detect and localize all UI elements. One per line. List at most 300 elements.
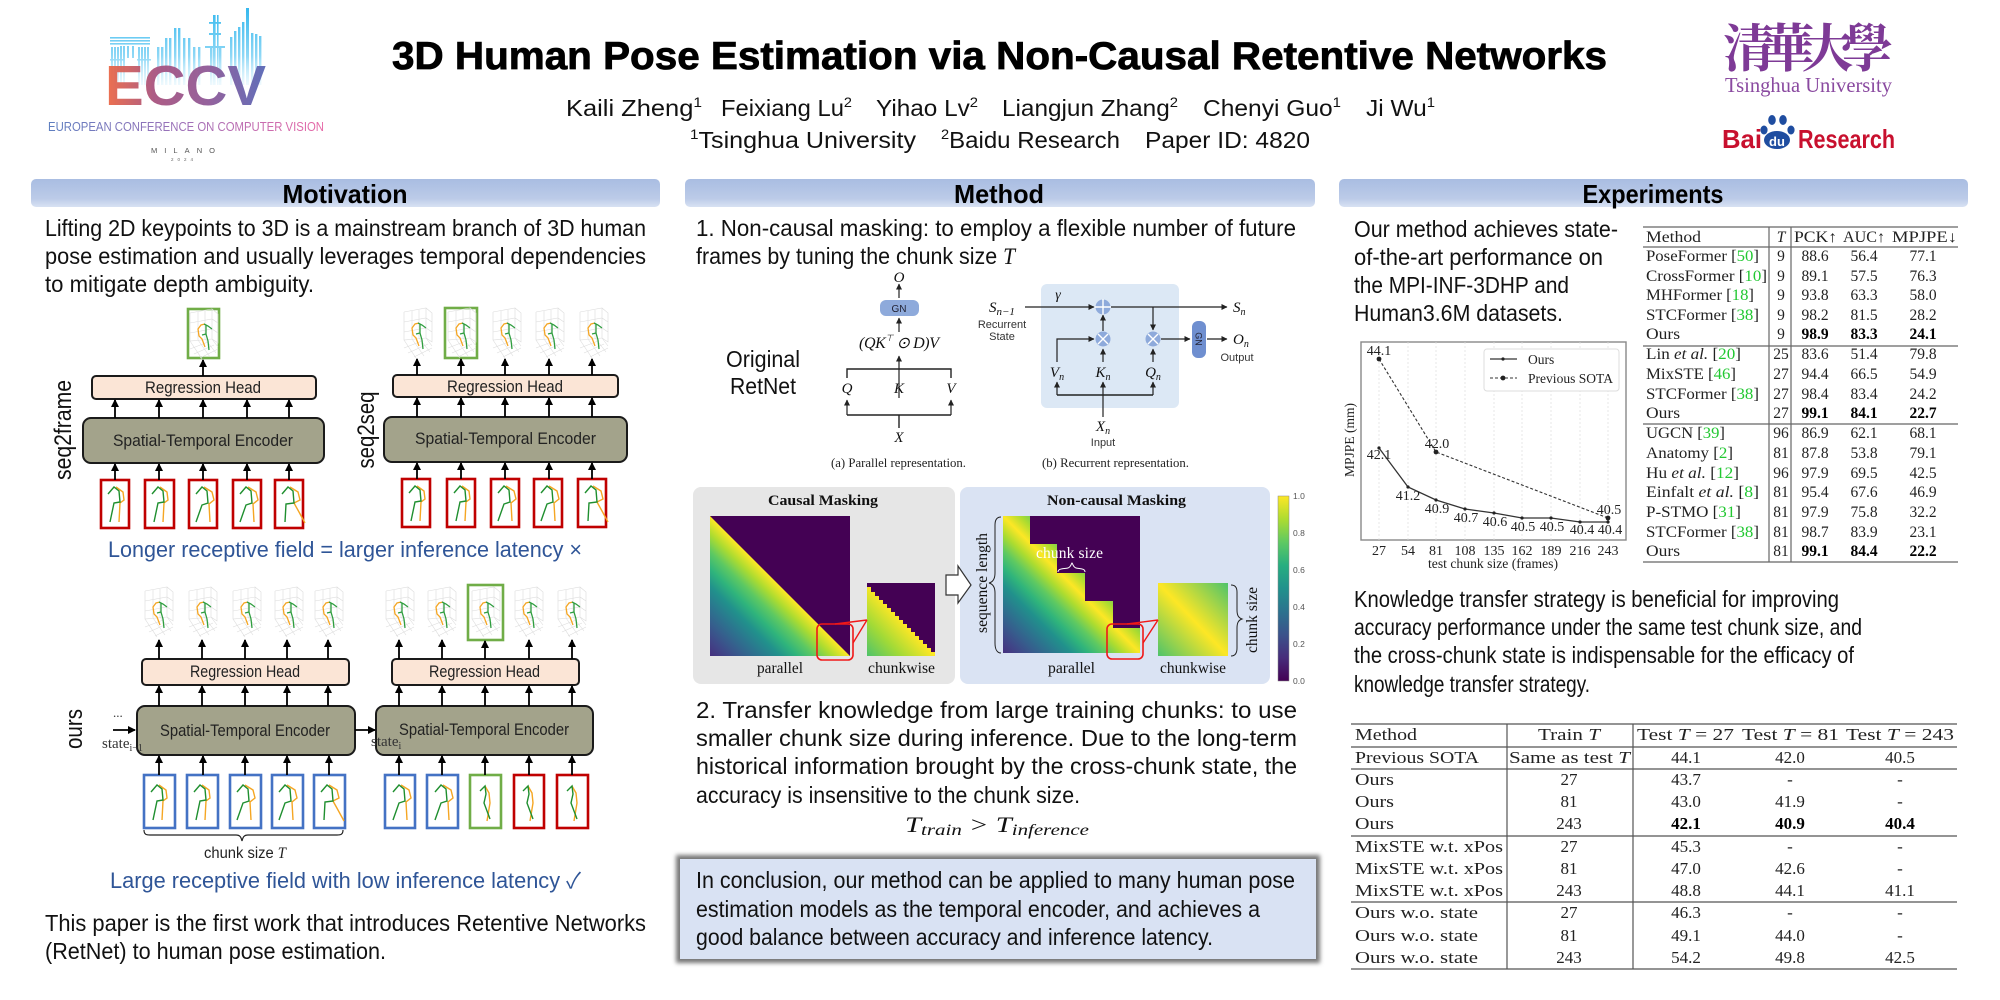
table: MPI-INF-3DHP comparison: Ours <box>1646 543 1680 560</box>
table: knowledge transfer comparison: - <box>1897 903 1903 922</box>
diagram: ours: Spatial-Temporal Encoder <box>160 721 330 740</box>
text: knowledge transfer: knowledge transfer strategy. <box>1354 671 1590 697</box>
diagram: ours: i−1 <box>130 743 143 754</box>
affiliations: 2 <box>941 126 949 142</box>
diagram: ours: i <box>398 741 402 752</box>
table: MPI-INF-3DHP comparison: 51.4 <box>1850 346 1878 363</box>
line chart: MPJPE vs test chunk size: 40.6 <box>1483 515 1507 530</box>
line chart: MPJPE vs test chunk size: 162 <box>1512 544 1532 559</box>
text: non-causal masking <box>696 215 1296 269</box>
colorbar: 0.2 <box>1293 639 1305 649</box>
table: knowledge transfer comparison: Ours <box>1355 770 1394 789</box>
table: MPI-INF-3DHP comparison: P-STMO [ 31] <box>1646 504 1741 521</box>
text: experiments intro: Human3.6M datasets. <box>1354 300 1563 326</box>
panel: motivation <box>31 179 660 964</box>
table: MPI-INF-3DHP comparison: 79.1 <box>1909 445 1937 462</box>
callout: conclusion: good balance between accuracy and inference latency. <box>696 924 1213 950</box>
table: MPI-INF-3DHP comparison: 83.3 <box>1850 326 1878 343</box>
line chart: MPJPE vs test chunk size: 135 <box>1484 544 1504 559</box>
line chart: MPJPE vs test chunk size: 216 <box>1570 544 1590 559</box>
logo: Tsinghua University: Tsinghua University <box>1725 73 1892 97</box>
text: knowledge transfer: accuracy performance under the same test chunk size, and <box>1354 614 1862 640</box>
colorbar: 0.6 <box>1293 565 1305 575</box>
table: MPI-INF-3DHP comparison: MixSTE [ 46] <box>1646 366 1736 383</box>
table: knowledge transfer comparison: 43.7 <box>1671 770 1701 789</box>
table: knowledge transfer comparison: - <box>1787 770 1793 789</box>
table: MPI-INF-3DHP comparison: 81 <box>1773 484 1789 501</box>
formula: > T <box>962 812 1014 837</box>
heading: method <box>685 179 1315 209</box>
table: knowledge transfer comparison: 49.8 <box>1775 948 1805 967</box>
text: transfer knowledge: accuracy is insensitive to the chunk size. <box>696 782 1080 808</box>
authors: Kaili Zheng <box>566 95 681 121</box>
diagram: ours: Spatial-Temporal Encoder <box>399 720 569 739</box>
authors: 1 <box>1333 94 1341 110</box>
diagram: parallel representation: V <box>946 381 957 397</box>
table: MPI-INF-3DHP comparison: 57.5 <box>1850 268 1878 285</box>
table: MPI-INF-3DHP comparison: 83.4 <box>1850 386 1878 403</box>
diagram: seq2frame: Regression Head <box>145 378 261 397</box>
caption: large receptive field: Large receptive field with low inference latency ✓ <box>110 868 582 893</box>
table: knowledge transfer comparison: Ours <box>1355 792 1394 811</box>
table: knowledge transfer comparison: 46.3 <box>1671 903 1701 922</box>
label: original retnet: RetNet <box>730 373 797 399</box>
table: MPI-INF-3DHP comparison: 28.2 <box>1909 307 1937 324</box>
formula: train <box>921 822 962 839</box>
table: MPI-INF-3DHP comparison: 89.1 <box>1801 268 1829 285</box>
diagram: ours: Regression Head <box>429 662 540 681</box>
table: MPI-INF-3DHP comparison: STCFormer [ 38] <box>1646 307 1759 324</box>
affiliations: 1 <box>690 126 699 142</box>
table: knowledge transfer comparison: 42.5 <box>1885 948 1915 967</box>
table: MPI-INF-3DHP comparison: 95.4 <box>1801 484 1829 501</box>
diagram: recurrent representation: n−1 <box>996 306 1015 318</box>
table: knowledge transfer comparison: 42.1 <box>1671 814 1701 833</box>
label: original retnet: Original <box>726 346 800 372</box>
authors: 2 <box>970 94 978 110</box>
diagram: seq2seq <box>353 308 627 527</box>
text: knowledge transfer <box>1354 586 1862 697</box>
line chart: MPJPE vs test chunk size: 108 <box>1454 544 1476 559</box>
table: MPI-INF-3DHP comparison: 81 <box>1773 504 1789 521</box>
table: knowledge transfer comparison: - <box>1897 770 1903 789</box>
table: knowledge transfer comparison: MixSTE w.t. xPos <box>1355 837 1503 856</box>
table: MPI-INF-3DHP comparison: MHFormer [ 18] <box>1646 287 1754 304</box>
logo: ECCV: MILANO <box>151 146 215 155</box>
table: MPI-INF-3DHP comparison: 63.3 <box>1850 287 1878 304</box>
table: MPI-INF-3DHP comparison: 69.5 <box>1850 465 1878 482</box>
table: MPI-INF-3DHP comparison: Lin et al. [20] <box>1646 346 1741 363</box>
table: knowledge transfer comparison: Test T = 81 <box>1742 725 1839 744</box>
diagram: recurrent representation: Output <box>1220 352 1254 364</box>
diagram: parallel representation: (a) Parallel representation. <box>831 455 966 470</box>
text: transfer knowledge <box>696 697 1297 808</box>
colorbar <box>1278 491 1305 686</box>
table: MPI-INF-3DHP comparison: 86.9 <box>1801 425 1829 442</box>
table: MPI-INF-3DHP comparison: STCFormer [ 38] <box>1646 386 1759 403</box>
line chart: MPJPE vs test chunk size: 27 <box>1372 544 1386 559</box>
table: knowledge transfer comparison: 81 <box>1560 792 1578 811</box>
table: MPI-INF-3DHP comparison: 27 <box>1773 366 1789 383</box>
logo: ECCV: ECCV <box>105 54 266 118</box>
table: MPI-INF-3DHP comparison: CrossFormer [ 10] <box>1646 268 1767 285</box>
authors: Chenyi Guo <box>1203 95 1324 121</box>
table: MPI-INF-3DHP comparison: 84.4 <box>1850 543 1878 560</box>
text: motivation closing: (RetNet) to human pose estimation. <box>45 938 386 964</box>
diagram: recurrent representation: K <box>1095 365 1106 381</box>
table: MPI-INF-3DHP comparison: 62.1 <box>1850 425 1878 442</box>
table: MPI-INF-3DHP comparison: STCFormer [ 38] <box>1646 524 1759 541</box>
authors: 2 <box>844 94 852 110</box>
table: MPI-INF-3DHP comparison: 54.9 <box>1909 366 1937 383</box>
diagram: recurrent representation: S <box>989 300 996 316</box>
table: MPI-INF-3DHP comparison: 42.5 <box>1909 465 1937 482</box>
table: knowledge transfer comparison: - <box>1897 792 1903 811</box>
colorbar: 1.0 <box>1293 491 1305 501</box>
callout: conclusion <box>676 855 1320 963</box>
panel: causal masking <box>693 487 955 684</box>
affiliations: Tsinghua University <box>699 127 917 153</box>
table: knowledge transfer comparison: 27 <box>1560 837 1578 856</box>
panel: non-causal masking: sequence length <box>974 533 991 633</box>
table: knowledge transfer comparison: 47.0 <box>1671 859 1701 878</box>
table: knowledge transfer comparison: Previous SOTA <box>1355 748 1480 767</box>
diagram: seq2frame: seq2frame <box>50 380 77 480</box>
table: knowledge transfer comparison: - <box>1787 903 1793 922</box>
table: MPI-INF-3DHP comparison: 56.4 <box>1850 248 1878 265</box>
table: MPI-INF-3DHP comparison: 81 <box>1773 543 1789 560</box>
line chart: MPJPE vs test chunk size: 81 <box>1429 544 1443 559</box>
callout: conclusion: estimation models as the temporal encoder, and achieves a <box>696 896 1260 922</box>
panel: non-causal masking <box>960 487 1270 684</box>
panel: causal masking: Causal Masking <box>768 493 879 509</box>
diagram: parallel representation <box>831 270 966 470</box>
text: experiments intro: of-the-art performance on <box>1354 244 1603 270</box>
table: MPI-INF-3DHP comparison: 9 <box>1777 248 1785 265</box>
table: knowledge transfer comparison: Ours w.o. state <box>1355 948 1478 967</box>
text: transfer knowledge: historical information brought by the cross-chunk state, the <box>696 753 1297 779</box>
table: MPI-INF-3DHP comparison <box>1643 227 1958 562</box>
table: MPI-INF-3DHP comparison: 32.2 <box>1909 504 1937 521</box>
text: motivation intro <box>45 215 646 297</box>
text: non-causal masking: frames by tuning the chunk size T <box>696 243 1017 269</box>
table: MPI-INF-3DHP comparison: 99.1 <box>1801 405 1829 422</box>
panel: experiments <box>1339 179 1968 969</box>
table: MPI-INF-3DHP comparison: 81 <box>1773 524 1789 541</box>
callout: conclusion: In conclusion, our method can be applied to many human pose <box>696 867 1295 893</box>
table: knowledge transfer comparison: 243 <box>1556 948 1582 967</box>
text: experiments intro <box>1354 216 1618 326</box>
table: knowledge transfer comparison: 27 <box>1560 770 1578 789</box>
table: knowledge transfer comparison: - <box>1897 926 1903 945</box>
diagram: recurrent representation: γ <box>1055 288 1061 303</box>
diagram: recurrent representation: GN <box>1194 332 1204 346</box>
heading: method: Method <box>954 179 1044 209</box>
table: knowledge transfer comparison: 44.1 <box>1671 748 1701 767</box>
table: MPI-INF-3DHP comparison: 75.8 <box>1850 504 1878 521</box>
table: knowledge transfer comparison: MixSTE w.t. xPos <box>1355 859 1503 878</box>
heading: motivation: Motivation <box>282 179 408 209</box>
text: knowledge transfer: Knowledge transfer strategy is beneficial for improving <box>1354 586 1839 612</box>
line chart: MPJPE vs test chunk size: 40.7 <box>1454 511 1478 526</box>
panel: non-causal masking: chunk size <box>1036 545 1103 562</box>
diagram: seq2seq: Spatial-Temporal Encoder <box>415 429 596 448</box>
diagram: recurrent representation: State <box>989 331 1015 343</box>
text: experiments intro: the MPI-INF-3DHP and <box>1354 272 1569 298</box>
table: knowledge transfer comparison: Test T = 27 <box>1637 725 1735 744</box>
logo: Baidu Research: Bai <box>1722 124 1762 154</box>
table: knowledge transfer comparison: 41.9 <box>1775 792 1805 811</box>
line chart: MPJPE vs test chunk size: 40.4 <box>1598 523 1622 538</box>
table: MPI-INF-3DHP comparison: 9 <box>1777 268 1785 285</box>
table: MPI-INF-3DHP comparison: 66.5 <box>1850 366 1878 383</box>
table: knowledge transfer comparison: 54.2 <box>1671 948 1701 967</box>
diagram: parallel representation: O <box>894 270 905 286</box>
table: MPI-INF-3DHP comparison: 88.6 <box>1801 248 1829 265</box>
table: MPI-INF-3DHP comparison: 84.1 <box>1850 405 1878 422</box>
table: MPI-INF-3DHP comparison: 81 <box>1773 445 1789 462</box>
table: knowledge transfer comparison: - <box>1897 859 1903 878</box>
table: MPI-INF-3DHP comparison: 98.4 <box>1801 386 1829 403</box>
table: MPI-INF-3DHP comparison: Einfalt et al. [8] <box>1646 484 1759 501</box>
table: MPI-INF-3DHP comparison: PCK↑ <box>1794 229 1837 246</box>
line chart: MPJPE vs test chunk size: Ours <box>1528 352 1554 367</box>
diagram: recurrent representation: X <box>1096 419 1105 435</box>
diagram: parallel representation: (QK <box>859 335 886 352</box>
text: experiments intro: Our method achieves state- <box>1354 216 1618 242</box>
line chart: MPJPE vs test chunk size: 40.9 <box>1425 502 1449 517</box>
line chart: MPJPE vs test chunk size: 44.1 <box>1367 344 1391 359</box>
table: MPI-INF-3DHP comparison: 9 <box>1777 287 1785 304</box>
diagram: recurrent representation: n <box>1244 339 1249 350</box>
panel: method <box>676 179 1320 963</box>
table: MPI-INF-3DHP comparison: 97.9 <box>1801 504 1829 521</box>
table: MPI-INF-3DHP comparison: 9 <box>1777 326 1785 343</box>
diagram: recurrent representation: O <box>1233 332 1244 348</box>
line chart: MPJPE vs test chunk size: 40.5 <box>1511 520 1535 535</box>
table: knowledge transfer comparison: MixSTE w.t. xPos <box>1355 881 1503 900</box>
diagram: recurrent representation: n <box>1105 426 1110 437</box>
table: MPI-INF-3DHP comparison: 98.9 <box>1801 326 1829 343</box>
table: knowledge transfer comparison: Ours <box>1355 814 1394 833</box>
table: MPI-INF-3DHP comparison: Anatomy [ 2] <box>1646 445 1733 462</box>
logo: Tsinghua University: 清華大學 <box>1723 21 1893 79</box>
panel: non-causal masking: chunk size <box>1244 587 1261 653</box>
table: MPI-INF-3DHP comparison: 9 <box>1777 307 1785 324</box>
diagram: parallel representation: K <box>893 381 905 397</box>
table: MPI-INF-3DHP comparison: Hu et al. [12] <box>1646 465 1739 482</box>
table: MPI-INF-3DHP comparison: T <box>1777 229 1787 246</box>
panel: non-causal masking: parallel <box>1048 660 1095 677</box>
diagram: ours <box>61 585 593 862</box>
logo: ECCV <box>48 8 324 162</box>
table: MPI-INF-3DHP comparison: 22.7 <box>1909 405 1937 422</box>
panel: non-causal masking: Non-causal Masking <box>1047 493 1187 509</box>
text: knowledge transfer: the cross-chunk state is indispensable for the efficacy of <box>1354 642 1855 668</box>
table: MPI-INF-3DHP comparison: 53.8 <box>1850 445 1878 462</box>
table: knowledge transfer comparison: 42.6 <box>1775 859 1805 878</box>
table: MPI-INF-3DHP comparison: 27 <box>1773 405 1789 422</box>
diagram: parallel representation: X <box>893 430 904 446</box>
table: knowledge transfer comparison: 45.3 <box>1671 837 1701 856</box>
table: knowledge transfer comparison: 243 <box>1556 814 1582 833</box>
text: transfer knowledge: 2. Transfer knowledge from large training chunks: to use <box>696 697 1297 723</box>
diagram: recurrent representation: n <box>1156 372 1161 383</box>
table: knowledge transfer comparison: Train T <box>1538 725 1602 744</box>
diagram: recurrent representation: Recurrent <box>978 319 1026 331</box>
table: knowledge transfer comparison: 48.8 <box>1671 881 1701 900</box>
text: motivation intro: to mitigate depth ambiguity. <box>45 271 314 297</box>
table: MPI-INF-3DHP comparison: 76.3 <box>1909 268 1937 285</box>
affiliations <box>690 126 1310 153</box>
diagram: recurrent representation: (b) Recurrent representation. <box>1042 455 1189 470</box>
table: knowledge transfer comparison: 81 <box>1560 859 1578 878</box>
diagram: parallel representation: ⊤ <box>885 333 894 343</box>
diagram: ours: ... <box>113 705 123 720</box>
table: MPI-INF-3DHP comparison: 83.9 <box>1850 524 1878 541</box>
label: original retnet <box>726 346 800 399</box>
title: 3D Human Pose Estimation via Non-Causal Retentive Networks <box>392 35 1607 78</box>
text: motivation closing: This paper is the first work that introduces Retentive Networks <box>45 910 646 936</box>
table: knowledge transfer comparison: 40.9 <box>1775 814 1805 833</box>
colorbar: 0.8 <box>1293 528 1305 538</box>
table: MPI-INF-3DHP comparison: 79.8 <box>1909 346 1937 363</box>
table: MPI-INF-3DHP comparison: 27 <box>1773 386 1789 403</box>
authors: Feixiang Lu <box>721 95 840 121</box>
authors: 1 <box>1427 94 1435 110</box>
table: MPI-INF-3DHP comparison: 46.9 <box>1909 484 1937 501</box>
table: knowledge transfer comparison: 44.0 <box>1775 926 1805 945</box>
table: MPI-INF-3DHP comparison: 22.2 <box>1909 543 1937 560</box>
table: knowledge transfer comparison: 49.1 <box>1671 926 1701 945</box>
text: motivation intro: pose estimation and usually leverages temporal dependencies <box>45 243 646 269</box>
diagram: parallel representation: GN <box>892 304 906 315</box>
table: knowledge transfer comparison: - <box>1897 837 1903 856</box>
panel: causal masking: chunkwise <box>868 660 935 677</box>
table: MPI-INF-3DHP comparison: PoseFormer [ 50] <box>1646 248 1759 265</box>
diagram: recurrent representation: n <box>1059 372 1064 383</box>
logo: Baidu Research <box>1722 115 1895 154</box>
line chart: MPJPE vs test chunk size: 42.0 <box>1425 437 1449 452</box>
diagram: recurrent representation: n <box>1106 372 1111 383</box>
diagram: seq2frame <box>50 309 324 528</box>
table: MPI-INF-3DHP comparison: 93.8 <box>1801 287 1829 304</box>
diagram: seq2frame: Spatial-Temporal Encoder <box>113 431 293 450</box>
table: MPI-INF-3DHP comparison: 98.2 <box>1801 307 1829 324</box>
authors: 2 <box>1170 94 1178 110</box>
table: knowledge transfer comparison: 42.0 <box>1775 748 1805 767</box>
authors: Yihao Lv <box>876 95 965 121</box>
table: MPI-INF-3DHP comparison: Ours <box>1646 326 1680 343</box>
diagram: recurrent representation <box>978 284 1254 470</box>
diagram: recurrent representation: V <box>1050 365 1059 381</box>
line chart: MPJPE vs test chunk size: MPJPE (mm) <box>1343 403 1358 477</box>
table: MPI-INF-3DHP comparison: 58.0 <box>1909 287 1937 304</box>
logo: Baidu Research: Research <box>1798 124 1895 154</box>
diagram: recurrent representation: n <box>1240 307 1246 318</box>
diagram: ours: state <box>371 734 398 750</box>
text: motivation intro: Lifting 2D keypoints to 3D is a mainstream branch of 3D human <box>45 215 646 241</box>
diagram: ours: ours <box>61 709 88 749</box>
table: MPI-INF-3DHP comparison: 24.2 <box>1909 386 1937 403</box>
diagram: recurrent representation: Q <box>1145 365 1156 381</box>
diagram: recurrent representation: Input <box>1091 437 1115 449</box>
line chart: MPJPE vs test chunk size: 243 <box>1598 544 1618 559</box>
diagram: recurrent representation: S <box>1233 300 1240 316</box>
line chart: MPJPE vs test chunk size: 42.1 <box>1367 448 1391 463</box>
affiliations: Baidu Research <box>949 127 1120 153</box>
table: MPI-INF-3DHP comparison: MPJPE↓ <box>1892 229 1957 246</box>
table: knowledge transfer comparison: Test T = 243 <box>1846 725 1954 744</box>
text: transfer knowledge: smaller chunk size during inference. Due to the long-term <box>696 725 1297 751</box>
authors: 1 <box>693 94 702 110</box>
line chart: MPJPE vs test chunk size: test chunk size (frames) <box>1428 557 1558 572</box>
logo: ECCV: 2024 <box>171 157 193 162</box>
arrow: causal to non-causal <box>946 566 971 603</box>
table: knowledge transfer comparison: 40.5 <box>1885 748 1915 767</box>
formula: T <box>905 812 923 837</box>
table: MPI-INF-3DHP comparison: 98.7 <box>1801 524 1829 541</box>
authors: Liangjun Zhang <box>1002 95 1161 121</box>
colorbar: 0.0 <box>1293 676 1305 686</box>
line chart: MPJPE vs test chunk size: 40.5 <box>1597 503 1621 518</box>
table: MPI-INF-3DHP comparison: 99.1 <box>1801 543 1829 560</box>
heading: experiments <box>1339 179 1968 209</box>
table: knowledge transfer comparison: Method <box>1355 725 1418 744</box>
text: motivation closing <box>45 910 646 964</box>
logo: Baidu Research: du <box>1769 134 1785 149</box>
table: knowledge transfer comparison: Ours w.o. state <box>1355 926 1478 945</box>
line chart: MPJPE vs test chunk size <box>1343 342 1626 572</box>
table: MPI-INF-3DHP comparison: 24.1 <box>1909 326 1937 343</box>
heading: experiments: Experiments <box>1582 179 1724 209</box>
line chart: MPJPE vs test chunk size: 54 <box>1401 544 1415 559</box>
table: MPI-INF-3DHP comparison: Method <box>1646 229 1701 246</box>
diagram: parallel representation: ⊙ D)V <box>893 335 941 352</box>
colorbar: 0.4 <box>1293 602 1305 612</box>
formula: inference <box>1012 822 1089 839</box>
table: MPI-INF-3DHP comparison: 77.1 <box>1909 248 1937 265</box>
table: MPI-INF-3DHP comparison: 68.1 <box>1909 425 1937 442</box>
table: knowledge transfer comparison: 44.1 <box>1775 881 1805 900</box>
diagram: parallel representation: Q <box>842 381 853 397</box>
logo: ECCV: EUROPEAN CONFERENCE ON COMPUTER VISION <box>48 120 324 134</box>
text: non-causal masking: 1. Non-causal masking: to employ a flexible number of future <box>696 215 1296 241</box>
heading: motivation <box>31 179 660 209</box>
table: MPI-INF-3DHP comparison: 87.8 <box>1801 445 1829 462</box>
table: MPI-INF-3DHP comparison: Ours <box>1646 405 1680 422</box>
table: knowledge transfer comparison: 43.0 <box>1671 792 1701 811</box>
affiliations: Paper ID: 4820 <box>1145 127 1310 153</box>
table: MPI-INF-3DHP comparison: 96 <box>1773 425 1789 442</box>
table: MPI-INF-3DHP comparison: 83.6 <box>1801 346 1829 363</box>
table: knowledge transfer comparison: Same as test T <box>1509 748 1632 767</box>
table: MPI-INF-3DHP comparison: AUC↑ <box>1843 229 1885 246</box>
line chart: MPJPE vs test chunk size: Previous SOTA <box>1528 371 1613 386</box>
table: knowledge transfer comparison: 243 <box>1556 881 1582 900</box>
caption: longer receptive field: Longer receptive field = larger inference latency × <box>108 537 582 562</box>
table: MPI-INF-3DHP comparison: UGCN [39] <box>1646 425 1725 442</box>
table: MPI-INF-3DHP comparison: 96 <box>1773 465 1789 482</box>
line chart: MPJPE vs test chunk size: 40.5 <box>1540 520 1564 535</box>
line chart: MPJPE vs test chunk size: 40.4 <box>1570 523 1594 538</box>
panel: non-causal masking: chunkwise <box>1160 660 1226 677</box>
diagram: ours: chunk size T <box>204 845 287 862</box>
table: knowledge transfer comparison <box>1351 724 1957 969</box>
table: MPI-INF-3DHP comparison: 67.6 <box>1850 484 1878 501</box>
table: MPI-INF-3DHP comparison: 97.9 <box>1801 465 1829 482</box>
line chart: MPJPE vs test chunk size: 41.2 <box>1396 489 1420 504</box>
